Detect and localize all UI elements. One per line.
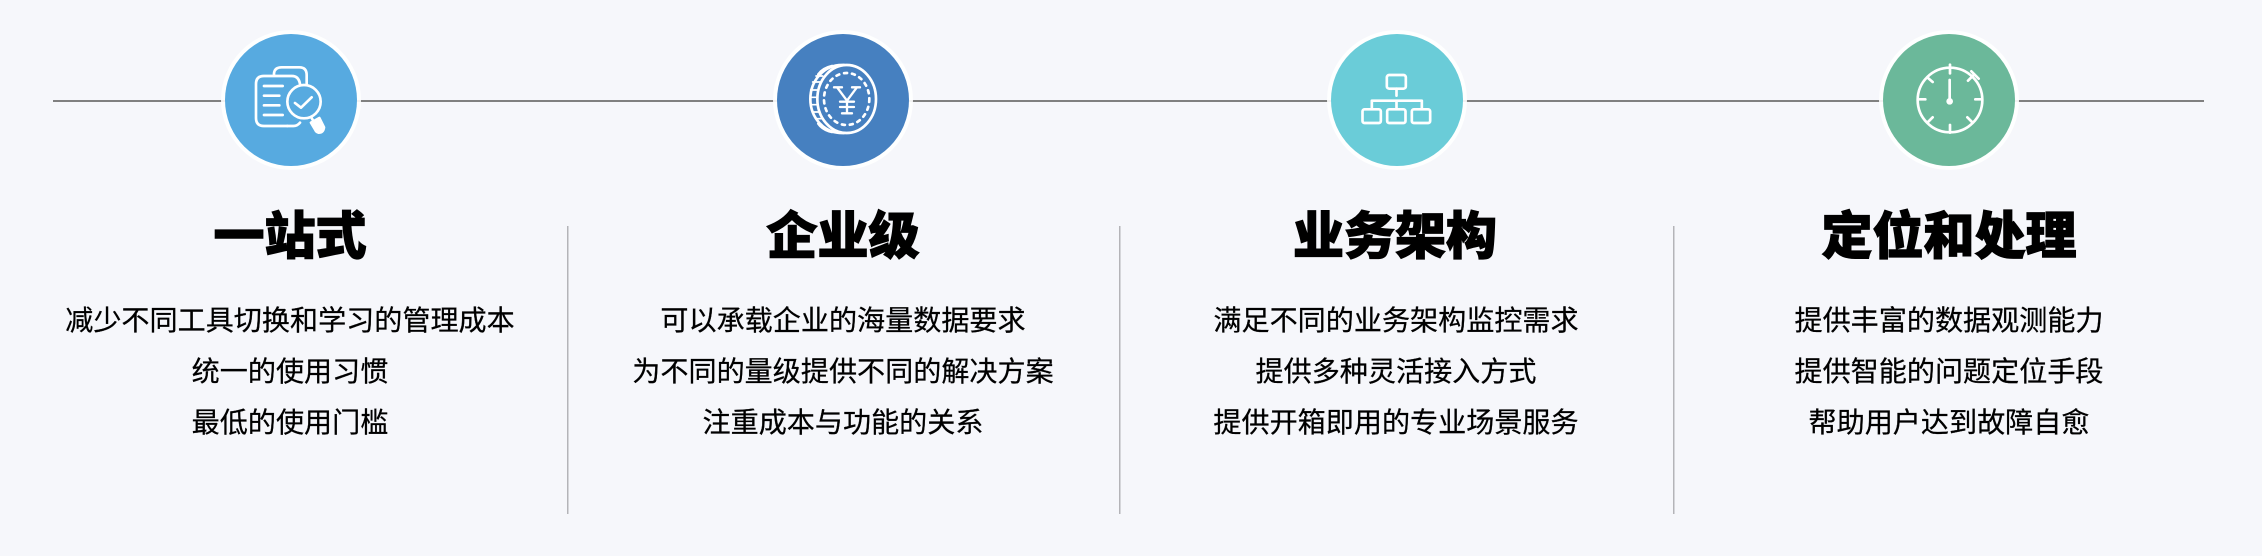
panel: 一站式 xyxy=(65,30,515,438)
text block: 业务架构 points: 提供开箱即用的专业场景服务 xyxy=(1213,407,1579,438)
panel: 企业级 xyxy=(632,30,1054,438)
column divider 1 xyxy=(567,226,568,514)
text block: 企业级 points xyxy=(632,305,1054,438)
text block: 业务架构 points: 满足不同的业务架构监控需求 xyxy=(1213,305,1579,336)
icon: document search xyxy=(221,30,361,170)
text block: 一站式 points: 减少不同工具切换和学习的管理成本 xyxy=(65,305,515,336)
text block: 定位和处理 points: 帮助用户达到故障自愈 xyxy=(1809,407,2089,438)
heading: 一站式: 一站式 xyxy=(213,208,367,265)
icon: yen coin xyxy=(773,30,913,170)
text block: 企业级 points: 可以承载企业的海量数据要求 xyxy=(660,305,1026,336)
icon: stopwatch xyxy=(1879,30,2019,170)
text block: 企业级 points: 为不同的量级提供不同的解决方案 xyxy=(632,356,1054,387)
text block: 企业级 points: 注重成本与功能的关系 xyxy=(703,407,983,438)
heading: 业务架构: 业务架构 xyxy=(1293,208,1497,265)
text block: 一站式 points: 最低的使用门槛 xyxy=(192,407,388,438)
text block: 定位和处理 points: 提供丰富的数据观测能力 xyxy=(1794,305,2104,336)
heading: 企业级: 企业级 xyxy=(766,208,920,265)
text block: 业务架构 points: 提供多种灵活接入方式 xyxy=(1256,356,1536,387)
panel: 定位和处理 xyxy=(1794,30,2104,438)
text block: 定位和处理 points: 提供智能的问题定位手段 xyxy=(1794,356,2104,387)
text block: 一站式 points xyxy=(65,305,515,438)
column divider 2 xyxy=(1119,226,1120,514)
heading: 定位和处理: 定位和处理 xyxy=(1821,208,2077,265)
column divider 3 xyxy=(1673,226,1674,514)
text block: 业务架构 points xyxy=(1213,305,1579,438)
panel: 业务架构 xyxy=(1213,30,1579,438)
text block: 一站式 points: 统一的使用习惯 xyxy=(192,356,388,387)
text block: 定位和处理 points xyxy=(1794,305,2104,438)
timeline line xyxy=(53,100,2204,102)
icon: org chart xyxy=(1327,30,1467,170)
